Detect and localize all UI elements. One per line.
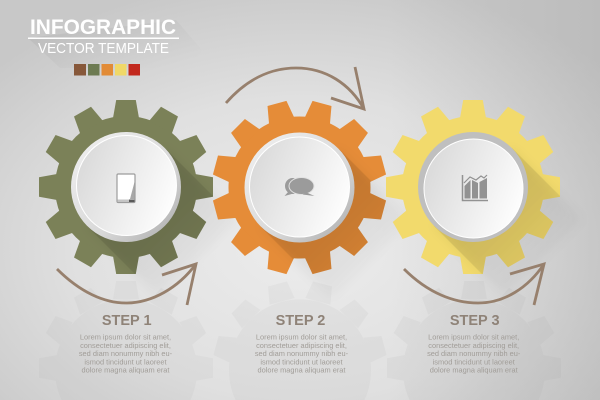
icon: chat bubbles [284,178,314,196]
step 2 body: consectetuer adipiscing elit, [256,341,347,350]
icon: chart [462,175,488,200]
reflected gear 2 [213,281,387,400]
step 2 body: dolore magna aliquam erat [258,366,345,375]
subheading: vector template: VECTOR TEMPLATE [38,40,169,57]
icon: phone [117,174,135,202]
long shadow on background [87,148,236,297]
disc face [76,136,176,236]
step 1 body: consectetuer adipiscing elit, [80,341,171,350]
step 3 heading: STEP 3 [450,313,500,329]
step 1 body [79,332,173,375]
arrow 3 [404,264,544,305]
gear shape [386,100,560,274]
disc ring [244,132,354,242]
title divider [28,38,179,39]
step 1 heading: STEP 1 [102,313,152,329]
step 3 body: consectetuer adipiscing elit, [428,341,519,350]
reflected gear 1 [39,281,213,400]
disc ring [418,132,528,242]
gear 3: yellow [386,100,561,278]
step 2 body: Lorem ipsum dolor sit amet, [256,332,347,342]
step 1 body: ismod tincidunt ut laoreet [84,357,167,366]
arrow 2 [226,67,364,109]
step 3 body: Lorem ipsum dolor sit amet, [428,332,519,342]
step 1 body: sed diam nonummy nibh eu- [79,349,173,358]
step 2 body: ismod tincidunt ut laoreet [260,357,343,366]
disc face [424,139,523,238]
long shadow on gear [434,148,560,274]
step 3 body: sed diam nonummy nibh eu- [427,349,521,358]
step 1 text [79,313,173,375]
step 3 text [427,313,521,375]
gear 1: olive [39,100,217,280]
reflected gear 3 [387,281,561,400]
long shadow on gear [91,152,213,274]
colour swatches [74,64,140,76]
step 3 body [427,332,521,375]
step 3 body: dolore magna aliquam erat [430,366,518,375]
disc ring [71,132,181,242]
long shadow on gear [260,148,386,274]
long shadow on background [434,148,583,297]
step 3 body: ismod tincidunt ut laoreet [433,357,515,366]
step 1 body: dolore magna aliquam erat [82,366,169,375]
gear shape [39,100,213,274]
step 2 heading: STEP 2 [276,313,325,329]
title shadow [28,20,202,68]
step 2 text [255,313,349,375]
step 1 body: Lorem ipsum dolor sit amet, [80,332,171,342]
long shadow on background [260,148,410,298]
arrow 1 [57,264,196,305]
gear shape [193,81,406,294]
disc face [250,137,350,237]
step 2 body: sed diam nonummy nibh eu- [255,349,349,358]
step 2 body [255,332,349,375]
heading: infographic: INFOGRAPHIC [30,15,176,39]
gear 2: orange [213,100,392,280]
title block [28,15,179,57]
